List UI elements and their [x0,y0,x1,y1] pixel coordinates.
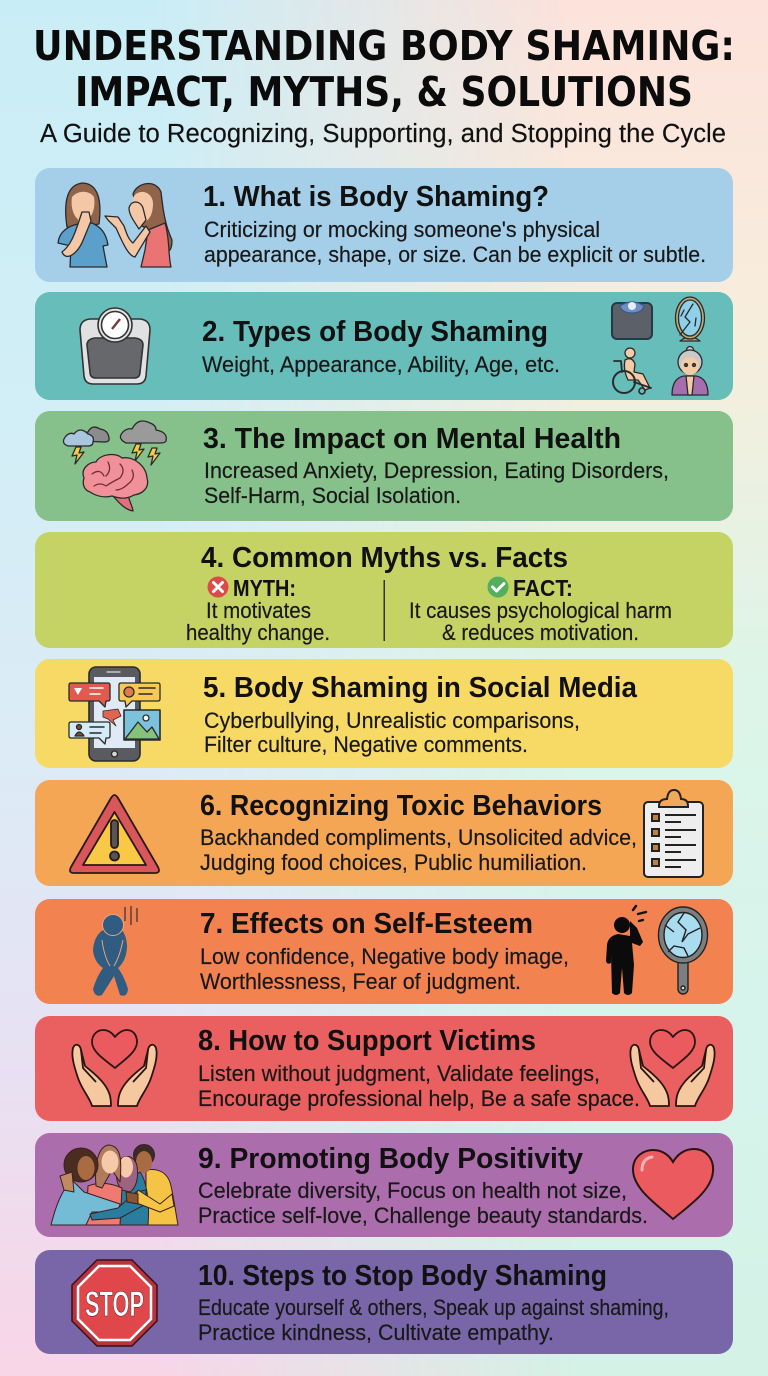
subtitle: A Guide to Recognizing, Supporting, and Stopping the Cycle [40,120,726,148]
panel: 5 social media [35,659,733,768]
myth column: It motivates [206,598,311,623]
heading 3: 3. The Impact on Mental Health [203,423,621,455]
fact column: & reduces motivation. [442,620,639,645]
text 1 [204,217,706,267]
icon: phone with chat bubbles [69,667,160,761]
icon: red x [208,576,228,598]
icon: two women gossiping and pointing [58,183,172,267]
text 6 [200,825,637,875]
icon: slumped figure [93,906,137,996]
text 1: appearance, shape, or size. Can be explicit or subtle. [204,242,706,267]
panel: 9 body positivity [35,1133,733,1237]
text 9 [198,1178,648,1228]
text 10: Educate yourself & others, Speak up against shaming, [198,1295,669,1320]
fact column: It causes psychological harm [409,598,672,623]
panel: 6 toxic behaviors [35,780,733,886]
icon: black figure holding head [606,906,646,995]
text 3: Self-Harm, Social Isolation. [204,483,461,508]
icon: small scale [612,302,652,339]
title [33,22,735,116]
panel: 7 self-esteem [35,899,733,1004]
heading 7: 7. Effects on Self-Esteem [200,908,533,940]
icon: elderly woman [672,346,708,395]
heading 5: 5. Body Shaming in Social Media [203,672,638,704]
text 7: Worthlessness, Fear of judgment. [200,969,521,994]
text 10 [198,1295,669,1345]
heading 2: 2. Types of Body Shaming [202,316,548,348]
heading 10: 10. Steps to Stop Body Shaming [198,1260,607,1292]
text 3: Increased Anxiety, Depression, Eating Disorders, [204,458,669,483]
icon: person in wheelchair [613,348,651,394]
fact column: FACT: [513,575,573,601]
text 2: Weight, Appearance, Ability, Age, etc. [202,352,560,377]
title: IMPACT, MYTHS, & SOLUTIONS [75,68,693,116]
heading 9: 9. Promoting Body Positivity [198,1143,583,1175]
text 7 [200,944,569,994]
text 5 [204,708,580,757]
panel: 10 stop body shaming [35,1250,733,1354]
text 6: Backhanded compliments, Unsolicited advice, [200,825,637,850]
text 10: Practice kindness, Cultivate empathy. [198,1320,554,1345]
panel: 1 what is body shaming [35,168,733,282]
text 5: Filter culture, Negative comments. [204,732,528,757]
text 9: Practice self-love, Challenge beauty standards. [198,1203,648,1228]
heading 8: 8. How to Support Victims [198,1025,536,1057]
text 7: Low confidence, Negative body image, [200,944,569,969]
icon: hands holding heart left [72,1030,157,1106]
icon: checklist clipboard [644,790,703,877]
text 8 [198,1061,640,1111]
text 6: Judging food choices, Public humiliation. [200,850,587,875]
icon: stop sign [72,1260,157,1346]
fact column [409,575,672,645]
icon: hands holding heart right [630,1030,715,1106]
heading 4: 4. Common Myths vs. Facts [201,542,568,574]
icon: green check [488,576,508,598]
myth column: MYTH: [233,575,296,601]
myth column: healthy change. [186,620,330,645]
icon: storm clouds [63,421,166,465]
heading 1: 1. What is Body Shaming? [203,181,549,213]
panel: 2 types of body shaming [35,292,733,400]
text 5: Cyberbullying, Unrealistic comparisons, [204,708,580,733]
panel: 8 support victims [35,1016,733,1121]
text 3 [204,458,669,508]
icon: cracked hand mirror [658,907,708,994]
icon: group hug [51,1144,178,1225]
text 8: Encourage professional help, Be a safe space. [198,1086,640,1111]
icon: stop sign: STOP [85,1285,144,1324]
myth column [186,575,330,645]
heading 6: 6. Recognizing Toxic Behaviors [200,790,602,822]
icon: warning triangle [70,795,159,873]
panel: 3 impact on mental health [35,411,733,521]
text 8: Listen without judgment, Validate feelings, [198,1061,600,1086]
icon: brain [83,455,148,511]
icon: red heart [633,1149,713,1219]
text 9: Celebrate diversity, Focus on health not size, [198,1178,627,1203]
icon: cracked mirror [676,297,704,341]
text 1: Criticizing or mocking someone's physical [204,217,600,242]
icon: bathroom scale [80,308,150,384]
panel: 4 myths vs facts [35,532,733,648]
